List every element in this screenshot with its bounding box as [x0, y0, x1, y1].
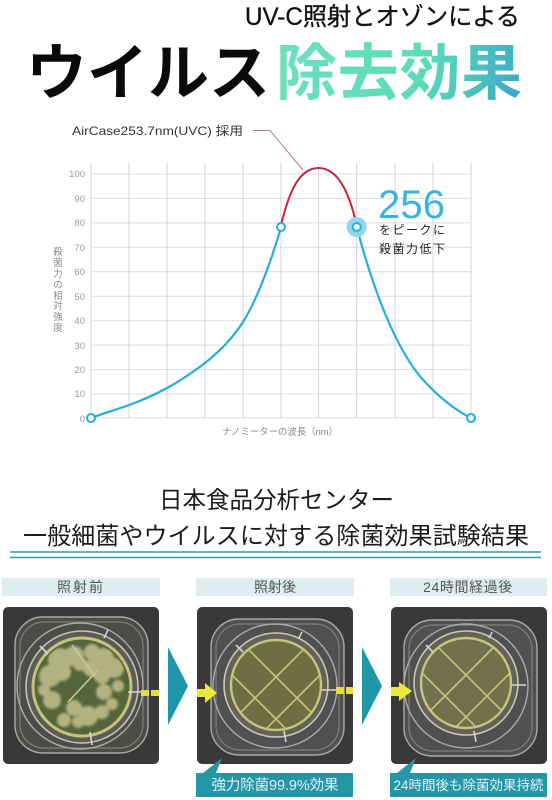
photo [3, 607, 159, 764]
chart: germicidal strength by wavelength [53, 124, 475, 438]
callout: persistence [390, 758, 547, 797]
callout: result [196, 758, 353, 797]
title [26, 3, 522, 107]
title line 2: black: ウイルス [26, 39, 270, 107]
y axis labels: 30 [74, 341, 85, 352]
y axis labels: 100 [69, 169, 85, 180]
y axis labels: 90 [74, 194, 85, 205]
leader label: AirCase253.7nm(UVC) 採用 [72, 124, 243, 138]
callout text: をピークに [379, 223, 445, 237]
y axis title: 度 [53, 322, 63, 334]
y axis labels: 0 [80, 414, 85, 425]
arrow 1 [168, 647, 188, 725]
callout: persistence: 24時間後も除菌効果持続 [394, 777, 544, 793]
y axis labels: 40 [74, 316, 85, 327]
callout number: 256 [378, 183, 445, 227]
heading line 2: 一般細菌やウイルスに対する除菌効果試験結果 [23, 523, 529, 550]
blue curve left [91, 227, 281, 418]
y axis title: 対 [53, 300, 63, 312]
heading line 1: 日本食品分析センター [159, 487, 394, 513]
callout: 殺菌力低下 [379, 241, 445, 256]
panel: before irradiation [2, 578, 160, 764]
photo [391, 607, 547, 764]
grid [91, 163, 471, 418]
red peak curve [281, 168, 357, 225]
arrow 2 [362, 647, 382, 725]
y axis title: 菌 [53, 257, 63, 269]
leader line [253, 130, 303, 170]
y axis title: の [53, 280, 63, 291]
label: 24時間経過後 [423, 579, 513, 595]
title line 2: gradient: 除去効果 [276, 39, 522, 107]
y axis labels: 10 [74, 389, 85, 400]
y axis title: 強 [53, 311, 63, 323]
highlight halo [347, 217, 367, 237]
y axis labels [69, 169, 85, 425]
label [196, 578, 354, 596]
y axis labels: 70 [74, 243, 85, 254]
y axis title: 相 [53, 290, 63, 302]
panel: 24 hours later [390, 578, 547, 800]
y axis labels: 60 [74, 267, 85, 278]
section heading [10, 487, 541, 558]
blue curve right [357, 227, 471, 418]
label [390, 578, 547, 596]
label [2, 578, 160, 596]
callout: result: 強力除菌99.9%効果 [212, 777, 338, 794]
y axis title [53, 246, 63, 334]
y axis title: 殺 [53, 246, 63, 258]
title line 1: UV-C照射とオゾンによる [245, 3, 520, 31]
data points [87, 223, 475, 422]
y axis labels: 50 [74, 292, 85, 303]
label: 照射前 [57, 579, 105, 595]
y axis title: 力 [53, 268, 63, 280]
photo [197, 607, 353, 764]
y axis labels: 80 [74, 218, 85, 229]
x axis title: ナノミーターの波長（nm） [222, 426, 338, 438]
y axis labels: 20 [74, 365, 85, 376]
label: 照射後 [254, 579, 296, 595]
callout [378, 183, 445, 256]
panel: after irradiation [196, 578, 354, 800]
